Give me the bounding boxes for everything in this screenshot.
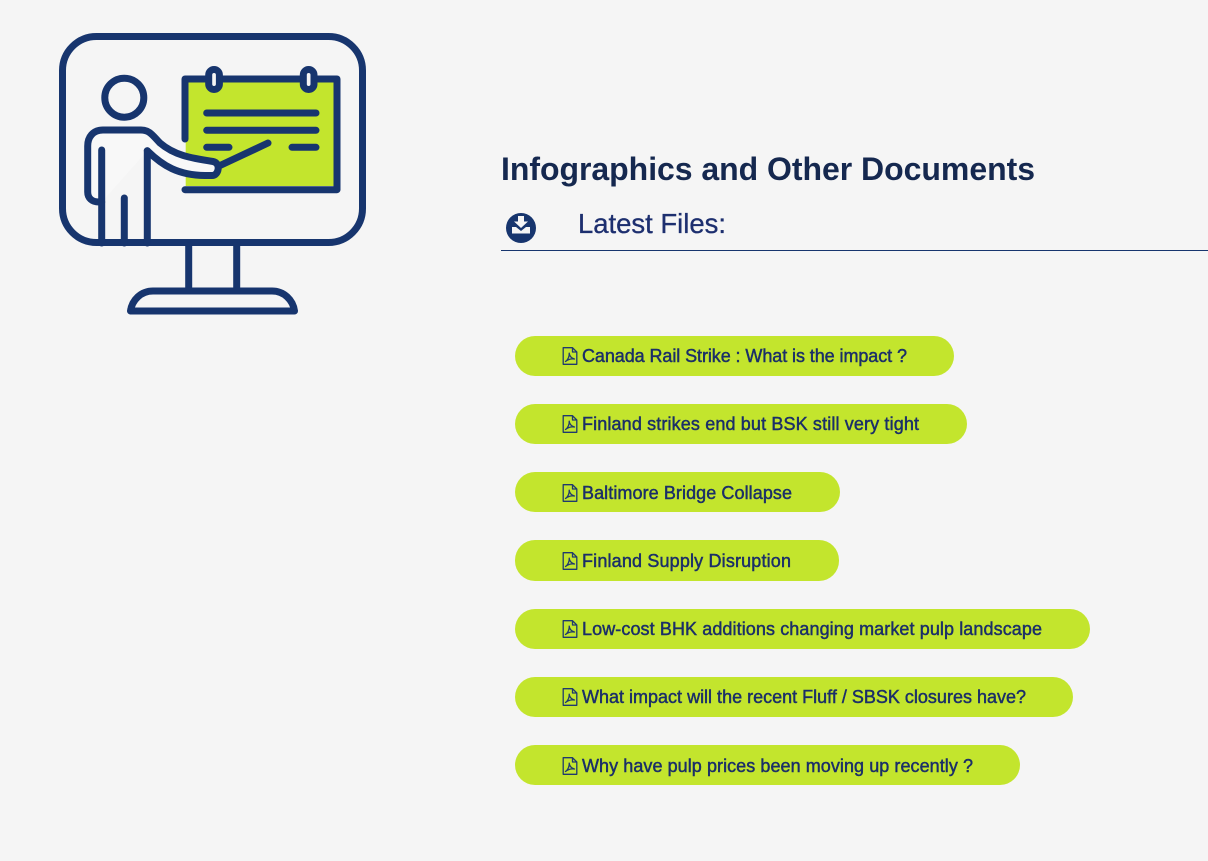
icon: pdf file bbox=[563, 758, 577, 774]
icon: monitor stand bbox=[189, 246, 237, 291]
file button: Canada Rail Strike: Canada Rail Strike : What is the impact ? bbox=[582, 346, 907, 366]
file button: Canada Rail Strike bbox=[515, 336, 954, 376]
file button: Finland Supply Disruption: Finland Supply Disruption bbox=[582, 551, 791, 571]
icon: monitor screen bbox=[62, 36, 362, 242]
icon: pdf file bbox=[563, 621, 577, 637]
icon: pdf file bbox=[563, 416, 577, 432]
icon: pdf file bbox=[563, 485, 577, 501]
file button: Baltimore Bridge Collapse bbox=[515, 472, 840, 512]
icon: presenter at monitor bbox=[62, 36, 362, 311]
icon: download badge bbox=[506, 213, 536, 243]
icon: pointer stick bbox=[219, 143, 268, 166]
icon: board outline bbox=[185, 79, 337, 190]
icon: presenter head bbox=[105, 78, 144, 117]
file button: Low-cost BHK additions: Low-cost BHK additions changing market pulp landscape bbox=[582, 619, 1042, 639]
icon: pdf file bbox=[563, 689, 577, 705]
file button: pulp prices: Why have pulp prices been moving up recently ? bbox=[582, 756, 973, 776]
file button: Low-cost BHK additions bbox=[515, 609, 1090, 649]
file button: Baltimore Bridge Collapse: Baltimore Bridge Collapse bbox=[582, 483, 792, 503]
icon: presenter legs bbox=[102, 150, 147, 243]
icon: presenter arm and torso bbox=[88, 130, 218, 202]
icon: board ring right bbox=[303, 70, 314, 90]
icon: pdf file bbox=[563, 553, 577, 569]
icon: board text lines bbox=[207, 113, 316, 147]
file button: Finland Supply Disruption bbox=[515, 540, 839, 581]
file button: Finland strikes end bbox=[515, 404, 967, 444]
heading: title: Infographics and Other Documents bbox=[501, 151, 1035, 187]
icon: board ring left bbox=[209, 70, 219, 90]
file button: Fluff / SBSK closures bbox=[515, 677, 1073, 717]
icon: board green fill bbox=[186, 82, 334, 186]
file button: Finland strikes end: Finland strikes end but BSK still very tight bbox=[582, 414, 919, 434]
divider under heading bbox=[501, 250, 1208, 251]
heading: latest files: Latest Files: bbox=[578, 208, 726, 239]
file button: Fluff / SBSK closures: What impact will the recent Fluff / SBSK closures have? bbox=[582, 687, 1026, 707]
file button: pulp prices bbox=[515, 745, 1020, 785]
icon: monitor base bbox=[130, 291, 294, 311]
icon: pdf file bbox=[563, 348, 577, 364]
